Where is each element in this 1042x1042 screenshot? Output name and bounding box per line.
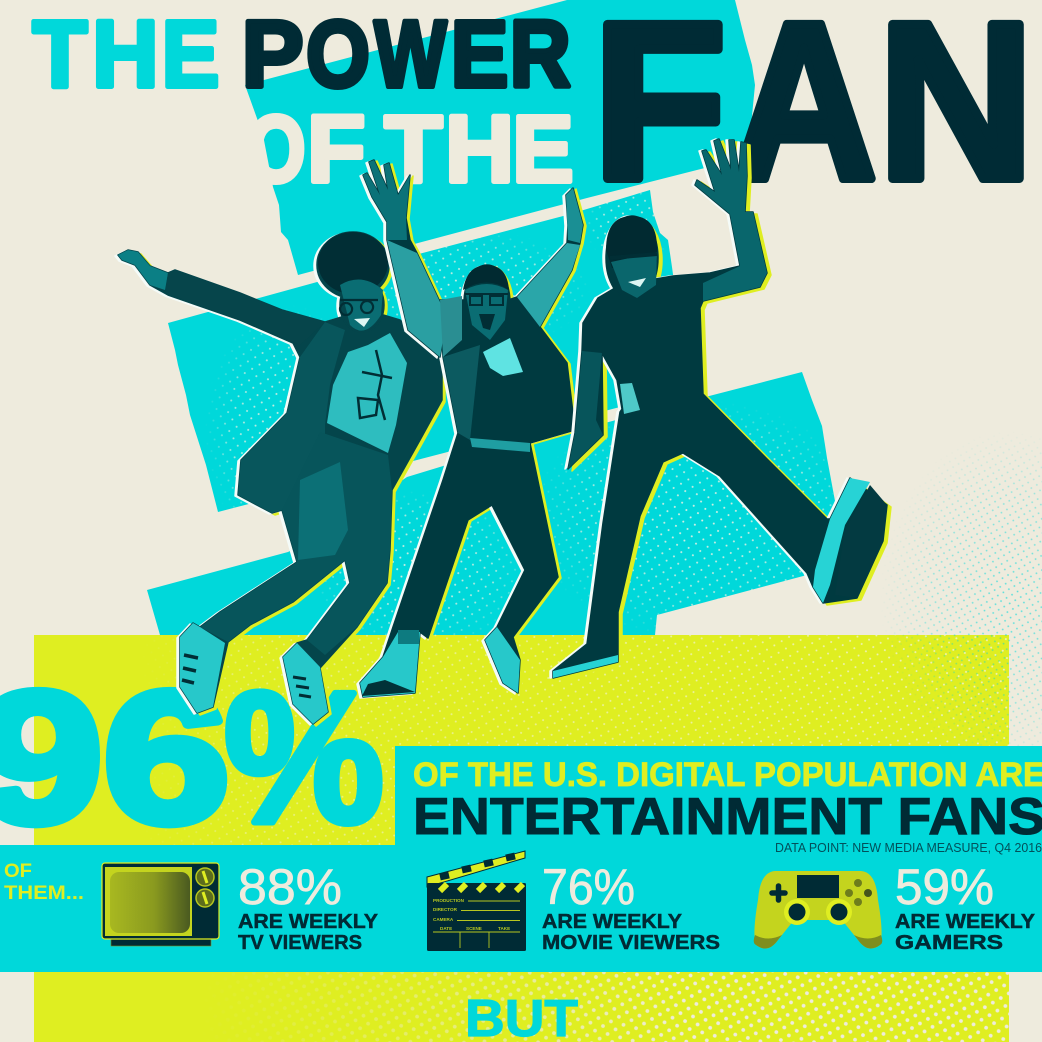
stat: gamers	[895, 859, 1035, 954]
word: POWER	[242, 2, 571, 108]
word: POWER: P	[242, 2, 304, 108]
sole	[835, 485, 887, 598]
belly	[470, 438, 530, 452]
arm and hand	[695, 139, 767, 301]
face	[611, 252, 657, 298]
icon: clapperboard	[427, 851, 526, 951]
stat: movies	[542, 859, 720, 954]
source note: DATA POINT: NEW MEDIA MEASURE, Q4 2016	[775, 841, 1042, 855]
word: POWER: W	[374, 2, 447, 108]
t-shirt print	[358, 350, 392, 420]
big statistic 96%: %	[224, 653, 384, 862]
hanging arm	[568, 351, 603, 469]
word: POWER: R	[510, 2, 571, 108]
icon: game controller	[754, 871, 882, 949]
words: OF THE	[247, 96, 574, 202]
sleeve right	[517, 243, 580, 327]
jacket left	[238, 322, 345, 513]
word: POWER: O	[306, 2, 370, 108]
icon: clapperboard: CAMERA	[433, 917, 454, 922]
stat: TV: ARE WEEKLY	[238, 910, 378, 933]
stat: TV: TV VIEWERS	[238, 931, 362, 954]
right shoe	[485, 627, 520, 693]
words: OF THE: O	[247, 96, 306, 202]
headphones	[483, 338, 523, 376]
stat: gamers: GAMERS	[895, 931, 1003, 954]
left shoe	[180, 623, 225, 713]
icon: clapperboard: DATE	[440, 926, 452, 931]
of them label: OF	[4, 861, 32, 882]
icon: clapperboard: SCENE	[466, 926, 482, 931]
words: OF THE: F	[307, 96, 365, 202]
big statistic 96%	[0, 653, 384, 862]
title	[33, 0, 1034, 226]
icon: clapperboard: DIRECTOR	[433, 907, 458, 912]
face	[465, 284, 508, 340]
word: POWER: E	[451, 2, 508, 108]
words: OF THE: T	[384, 96, 442, 202]
sole rim	[813, 478, 870, 603]
glasses	[610, 254, 657, 258]
cyan stats band	[0, 746, 1042, 972]
left shoe stripes	[182, 655, 198, 683]
stat: TV	[238, 859, 378, 954]
hair	[606, 216, 657, 268]
glasses	[465, 294, 508, 305]
person: man in t-shirt	[550, 139, 891, 680]
stat: movies: 76%	[542, 859, 635, 915]
halftone dots on cyan	[206, 192, 834, 635]
torn cyan paper shapes	[147, 0, 835, 635]
word: THE: T	[33, 2, 87, 108]
stat: movies: ARE WEEKLY	[542, 910, 682, 933]
sleeve left	[387, 240, 447, 357]
icon: clapperboard: TAKE	[498, 926, 510, 931]
word: THE: E	[162, 2, 219, 108]
glasses	[340, 300, 378, 315]
mouth	[354, 318, 370, 327]
person: man in cap	[357, 160, 586, 698]
headline: ENTERTAINMENT FANS	[413, 788, 1042, 846]
hand	[118, 250, 168, 290]
word: THE	[33, 2, 219, 108]
headline	[413, 756, 1042, 846]
of them label	[4, 861, 84, 904]
face	[340, 280, 383, 331]
cap	[463, 265, 509, 290]
t-shirt	[327, 333, 407, 453]
words: OF THE: H	[445, 96, 514, 202]
pocket item	[620, 383, 640, 414]
right shoe stripes	[293, 677, 311, 697]
stat: gamers: 59%	[895, 859, 994, 915]
jeans highlight	[298, 462, 348, 560]
stat: gamers: ARE WEEKLY	[895, 910, 1035, 933]
shoe rim	[553, 655, 618, 678]
icon: clapperboard: PRODUCTION	[433, 898, 465, 903]
smile	[628, 278, 646, 287]
word: FAN	[593, 0, 1034, 226]
halftone dots on yellow	[140, 635, 1009, 1042]
right shoe	[283, 643, 328, 724]
word: THE: H	[92, 2, 159, 108]
raised hand	[363, 160, 410, 240]
ankle	[398, 630, 419, 644]
right hand	[566, 188, 583, 243]
jacket sleeve	[165, 270, 325, 345]
person: woman	[115, 232, 445, 726]
hood	[440, 296, 462, 357]
halftone dots on cream	[885, 437, 1042, 746]
left sole	[362, 680, 415, 696]
of them label: THEM...	[4, 883, 84, 904]
words: OF THE: E	[512, 96, 574, 202]
hair	[318, 232, 388, 294]
stat: movies: MOVIE VIEWERS	[542, 931, 720, 954]
jacket panel	[443, 345, 480, 440]
stat: TV: 88%	[238, 859, 342, 915]
icon: television	[102, 863, 219, 946]
yellow panel	[34, 635, 1009, 1042]
left shoe	[360, 632, 420, 697]
jeans	[200, 432, 392, 655]
mouth	[479, 314, 495, 330]
